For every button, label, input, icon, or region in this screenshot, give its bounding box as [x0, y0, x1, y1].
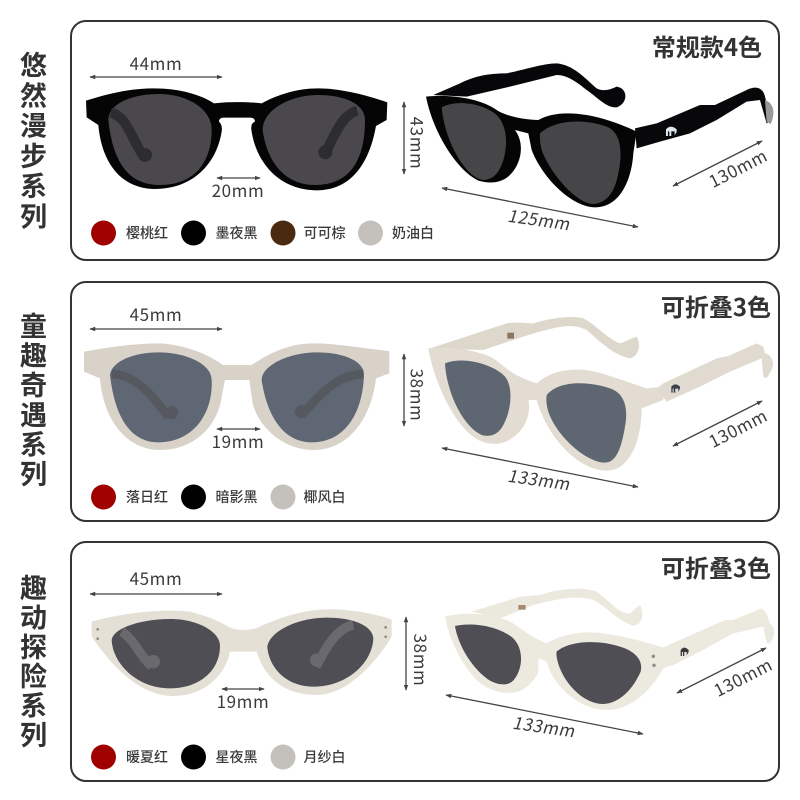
colour swatches: 樱桃红: [126, 223, 168, 243]
dimension: lens width 45mm: 45mm: [130, 565, 182, 590]
side heading: series two: 童趣奇遇系列: [20, 305, 47, 492]
badge heading: regular 4 colours: 常规款4色: [652, 28, 762, 63]
dimension: height 38mm: [404, 354, 430, 426]
dimension: height 38mm: 38mm: [409, 634, 434, 686]
colour swatches: [91, 484, 346, 510]
dimension: lens width 44mm: 44mm: [130, 50, 182, 75]
glasses: ivory side view: [445, 589, 774, 710]
dimension: height 38mm: 38mm: [406, 369, 430, 421]
dimension: frame width 133mm: [446, 695, 643, 742]
dimension: lens width 45mm: 45mm: [130, 301, 182, 326]
colour swatches: 椰风白: [304, 487, 346, 507]
dimension: height 43mm: 43mm: [406, 117, 430, 169]
colour swatches: 墨夜黑: [216, 223, 258, 243]
dimension: temple 130mm: 130mm: [704, 142, 771, 193]
glasses: ivory front view: [92, 609, 392, 696]
panel: regular series: [20, 21, 779, 260]
side heading: series one: 悠然漫步系列: [20, 44, 47, 234]
dimension: temple 130mm: [673, 401, 771, 453]
dimension: frame width 133mm: 133mm: [510, 709, 580, 742]
colour swatches: [91, 220, 434, 246]
dimension: bridge 19mm: 19mm: [212, 428, 264, 453]
panel: foldable cat-eye series: [20, 542, 779, 781]
colour swatches: 奶油白: [392, 223, 434, 243]
badge heading: foldable 3 colours: 可折叠3色: [661, 288, 771, 323]
dimension: lens width 44mm: [90, 50, 222, 77]
dimension: height 38mm: [406, 617, 434, 690]
glasses: black side view: [426, 63, 773, 207]
colour swatches: [91, 744, 346, 770]
colour swatches: 落日红: [126, 487, 168, 507]
colour swatches: 月纱白: [304, 747, 346, 767]
dimension: temple 130mm: 130mm: [709, 651, 776, 702]
dimension: lens width 45mm: [90, 301, 222, 329]
colour swatches: 可可棕: [304, 223, 346, 243]
colour swatches: 暗影黑: [216, 487, 258, 507]
dimension: lens width 45mm: [90, 565, 222, 594]
dimension: temple 130mm: [677, 648, 776, 702]
glasses: beige side view: [428, 317, 773, 471]
dimension: bridge 20mm: 20mm: [212, 177, 264, 202]
badge heading: foldable 3 colours: 可折叠3色: [661, 549, 771, 584]
colour swatches: 星夜黑: [216, 747, 258, 767]
glasses: black front view: [86, 88, 387, 190]
panel: foldable round series: [20, 282, 779, 521]
colour swatches: 暖夏红: [126, 747, 168, 767]
side heading: series three: 趣动探险系列: [20, 567, 47, 753]
dimension: height 43mm: [404, 102, 430, 174]
dimension: temple 130mm: [673, 141, 771, 193]
dimension: frame width 125mm: [442, 188, 638, 235]
dimension: bridge 19mm: 19mm: [217, 688, 269, 713]
dimension: frame width 133mm: 133mm: [505, 462, 575, 495]
dimension: frame width 133mm: [442, 448, 638, 495]
glasses: beige front view: [84, 343, 389, 450]
dimension: temple 130mm: 130mm: [704, 402, 771, 453]
dimension: frame width 125mm: 125mm: [505, 202, 575, 235]
